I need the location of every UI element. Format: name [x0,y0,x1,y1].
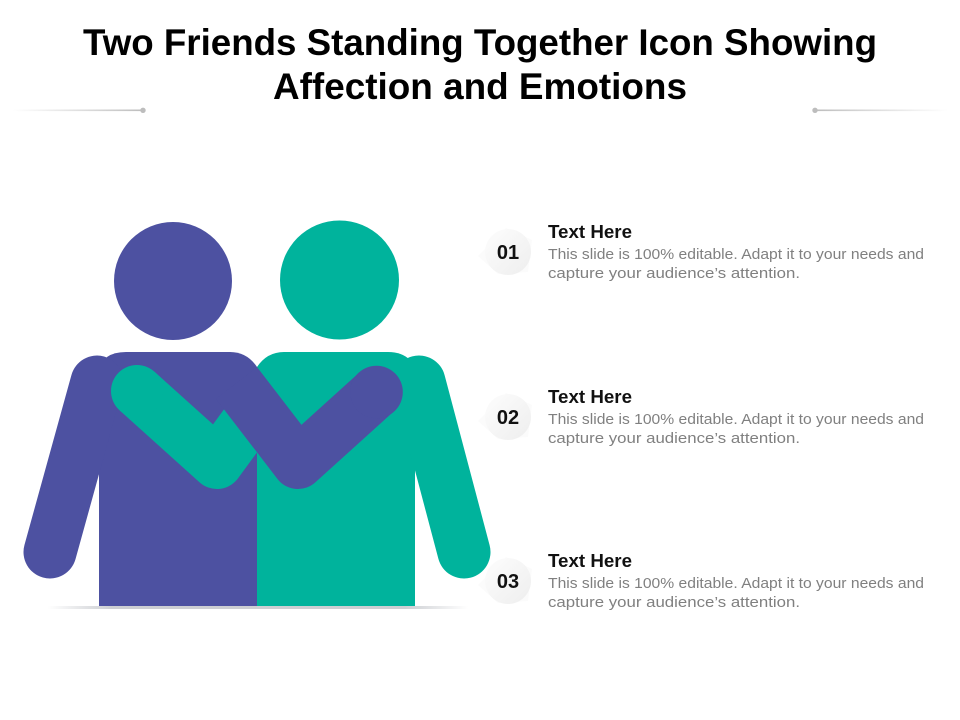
body text 01 [548,247,924,282]
number badge 01: 01 [497,242,519,264]
number badge 03 [478,557,532,604]
friend 1 purple body [99,352,257,606]
item 02 [478,387,924,447]
body text 03: This slide is 100% editable. Adapt it to your needs and [548,576,924,592]
title [83,22,877,107]
icon: two friends standing together [48,220,468,609]
number badge 01 [478,228,532,275]
number badge 02: 02 [497,407,519,429]
friend 1 purple arm around shoulder [236,383,376,463]
number badge 03: 03 [497,571,519,593]
item 01 [478,222,924,282]
number badge 02 [478,393,532,440]
item 03 [478,551,924,611]
friend 2 teal outer arm [419,382,464,552]
title: Affection and Emotions [273,66,687,107]
friend 2 teal head [280,220,399,340]
body text 02 [548,412,924,447]
friend 1 purple head [114,222,232,340]
body text 03: capture your audience’s attention. [548,595,800,611]
ground shadow [48,606,468,609]
heading 02: Text Here [548,387,632,407]
friend 2 teal body [257,352,415,606]
title: Two Friends Standing Together Icon Showing [83,22,877,63]
heading 03: Text Here [548,551,632,571]
body text 01: This slide is 100% editable. Adapt it to your needs and [548,247,924,263]
body text 03 [548,576,924,611]
friend 2 teal arm around shoulder [137,391,247,463]
body text 01: capture your audience’s attention. [548,266,800,282]
heading 01: Text Here [548,222,632,242]
left title divider [12,108,146,113]
body text 02: This slide is 100% editable. Adapt it to your needs and [548,412,924,428]
body text 02: capture your audience’s attention. [548,431,800,447]
right title divider [812,108,948,113]
friend 1 purple outer arm [50,382,97,552]
